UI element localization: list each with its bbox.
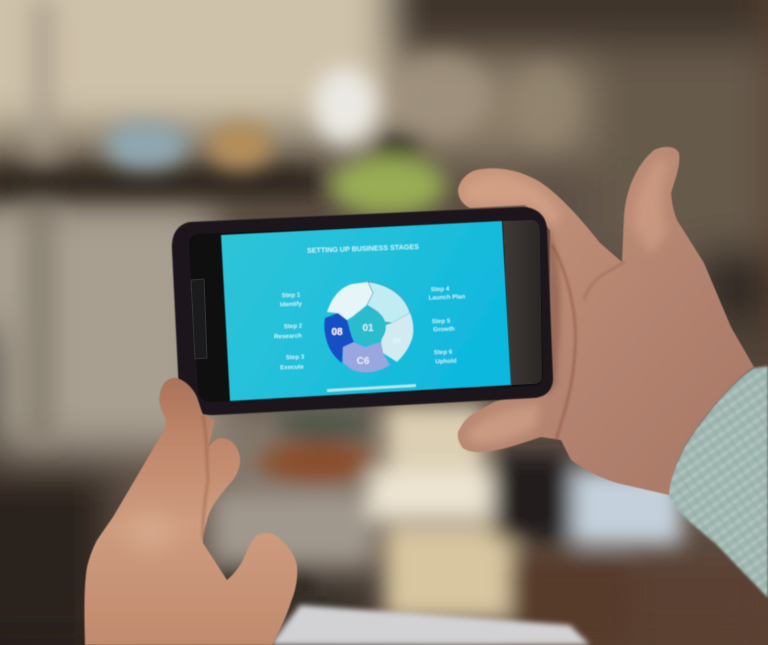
segment: right (381, 313, 413, 362)
left hand (84, 378, 297, 645)
screen: right labels: Launch Plan (428, 293, 466, 302)
right hand: lit index finger (467, 176, 558, 223)
segment: top left (327, 282, 373, 320)
right hand: thumb light (633, 162, 666, 250)
phone side button notch (191, 279, 207, 359)
screen: left labels: Research (274, 333, 302, 340)
screen: bottom reflection bar (327, 384, 416, 392)
screen: left labels (274, 292, 305, 371)
screen (221, 221, 511, 401)
screen: right labels: Step 6 (434, 349, 453, 356)
phone right bezel tint (503, 220, 542, 385)
screen: cycle diagram: 01 (362, 323, 374, 334)
segment: center (350, 309, 386, 345)
screen: right labels: Growth (433, 326, 455, 333)
screen: left labels: Step 1 (282, 292, 301, 299)
right hand: lit lower finger (466, 404, 540, 445)
phone inner bezel (189, 220, 543, 402)
right hand: shadow beside phone (546, 225, 560, 395)
right shirt sleeve (669, 366, 768, 598)
screen: right labels: Step 5 (432, 318, 451, 325)
right hand (458, 147, 754, 495)
screen: cycle diagram: 08 (331, 327, 343, 338)
screen: title: SETTING UP BUSINESS STAGES (307, 242, 419, 255)
background: white paper on table (270, 605, 590, 645)
phone body (172, 207, 553, 415)
right hand: thumb crease (584, 262, 625, 300)
left hand: highlight on back of hand (134, 520, 166, 545)
screen: cycle diagram (324, 282, 413, 372)
screen: cycle diagram: C6 (357, 356, 370, 367)
segment: bottom (343, 342, 390, 372)
screen: cycle diagram: 04 (393, 338, 401, 345)
screen: right labels: Step 4 (431, 286, 450, 293)
screen: left labels: Step 3 (286, 354, 305, 361)
screen: left labels: Step 2 (284, 323, 303, 330)
phone (172, 207, 553, 415)
background: plant pot and table objects (215, 405, 682, 645)
background: objects on the shelf (104, 53, 575, 216)
screen: left labels: Execute (280, 364, 304, 371)
right hand: palm crease (552, 245, 575, 440)
left hand: finger shadow (203, 415, 208, 540)
screen: left labels: Identify (280, 301, 303, 308)
segment: top right (367, 282, 410, 323)
segment: left dark blue (324, 313, 354, 363)
screen: right labels (428, 286, 466, 365)
screen: right labels: Uphold (435, 358, 457, 365)
background: dark shelf and pillar (0, 0, 320, 440)
